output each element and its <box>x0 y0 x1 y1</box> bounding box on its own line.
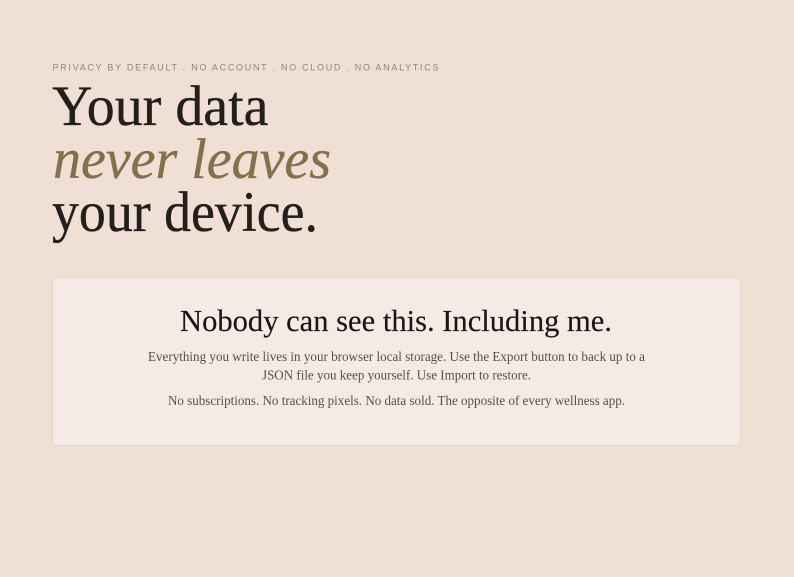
panel background <box>52 278 740 446</box>
main headline <box>52 75 331 244</box>
headline line 3: your device. <box>52 181 318 244</box>
paragraph line 2: JSON file you keep yourself. Use Import to restore. <box>262 368 531 382</box>
eyebrow label: PRIVACY BY DEFAULT . NO ACCOUNT . NO CLOUD . NO ANALYTICS <box>52 62 438 72</box>
paragraph line 1: Everything you write lives in your browser local storage. Use the Export button to back up to a <box>148 349 645 364</box>
panel: privacy statement <box>52 278 740 446</box>
headline line 1: Your data <box>52 75 268 138</box>
panel heading: Nobody can see this. Including me. <box>180 304 612 338</box>
body paragraph <box>148 349 645 382</box>
headline line 2: accent: never leaves <box>53 128 331 191</box>
closing statement: No subscriptions. No tracking pixels. No data sold. The opposite of every wellness app. <box>168 393 625 408</box>
